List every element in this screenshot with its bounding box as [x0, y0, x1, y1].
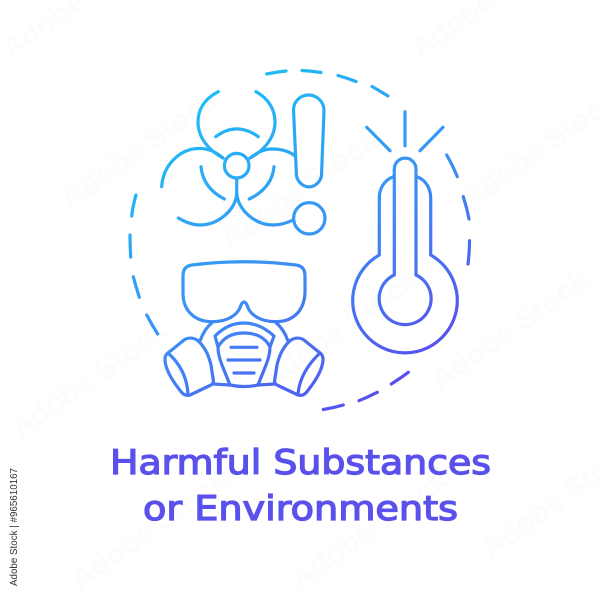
text: Adobe Stock [65, 463, 234, 596]
dashed circle ring [130, 70, 470, 410]
text: Adobe Stock [255, 263, 424, 396]
title [110, 443, 491, 529]
text: Adobe Stock [425, 263, 594, 396]
text: Adobe Stock [5, 313, 174, 446]
title: Harmful Substances [110, 443, 491, 483]
stock id side text: Adobe Stock | #965610167 [9, 468, 20, 586]
text: Adobe Stock [55, 83, 224, 216]
text: Adobe Stock [285, 463, 454, 596]
icon: gas mask with goggles [165, 262, 323, 395]
icon: biohazard symbol [162, 92, 295, 225]
icon: thermometer with rays [353, 112, 457, 353]
icon: exclamation mark [294, 95, 325, 234]
text: Adobe Stock [215, 123, 384, 256]
title: or Environments [143, 489, 458, 529]
